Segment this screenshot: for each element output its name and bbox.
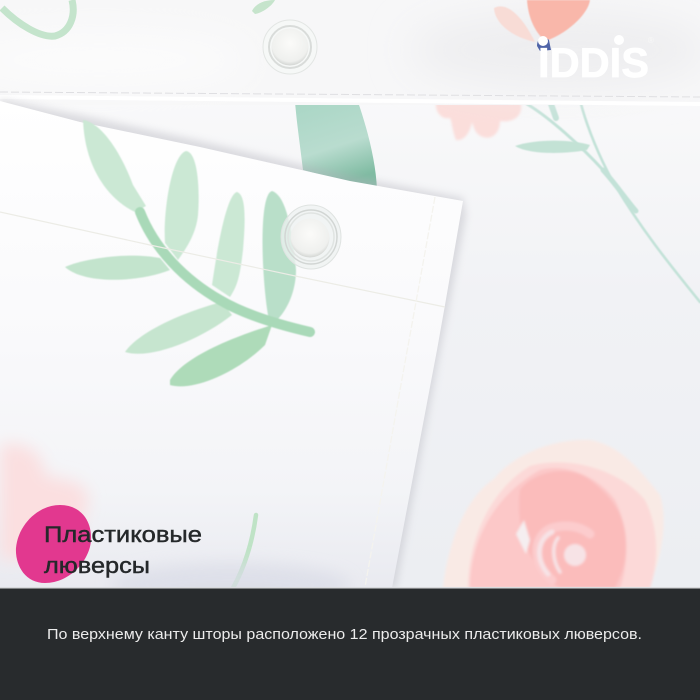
front flap shadow (0, 99, 466, 588)
bottom description bar (0, 587, 700, 700)
pink flower fragment (0, 444, 88, 560)
pink tulip flower (494, 0, 590, 42)
title: Пластиковые (44, 522, 202, 547)
vertical flap seam (365, 197, 435, 587)
top eyelet (263, 20, 317, 74)
description text: По верхнему канту шторы расположено 12 прозрачных пластиковых люверсов. (47, 626, 642, 643)
green branch (65, 120, 310, 386)
title (44, 522, 202, 578)
rose white swirl (516, 520, 590, 580)
branch stem (140, 212, 310, 332)
lower eyelet (281, 205, 341, 269)
logo: IDDIS: ® (648, 36, 654, 45)
logo: IDDIS: IDDIS (538, 39, 649, 86)
front flap (0, 101, 463, 607)
top leaf fragment (252, 0, 275, 14)
large teal leaf (295, 102, 377, 190)
back curtain panel (0, 95, 700, 590)
green side leaf (515, 141, 590, 153)
green flower stems (527, 104, 700, 302)
hem seam (0, 92, 700, 104)
rose flower (443, 440, 664, 588)
pink flower behind the seam (436, 103, 521, 140)
soft fabric shading (110, 563, 350, 607)
title: люверсы (44, 553, 150, 578)
green loop stem (2, 0, 73, 36)
branch leaves (65, 120, 296, 386)
horizontal flap seam (0, 212, 445, 307)
logo dot shadow (537, 38, 551, 51)
lower green stem (233, 515, 256, 588)
top hem band (0, 0, 700, 105)
pink accent blob (16, 505, 91, 583)
